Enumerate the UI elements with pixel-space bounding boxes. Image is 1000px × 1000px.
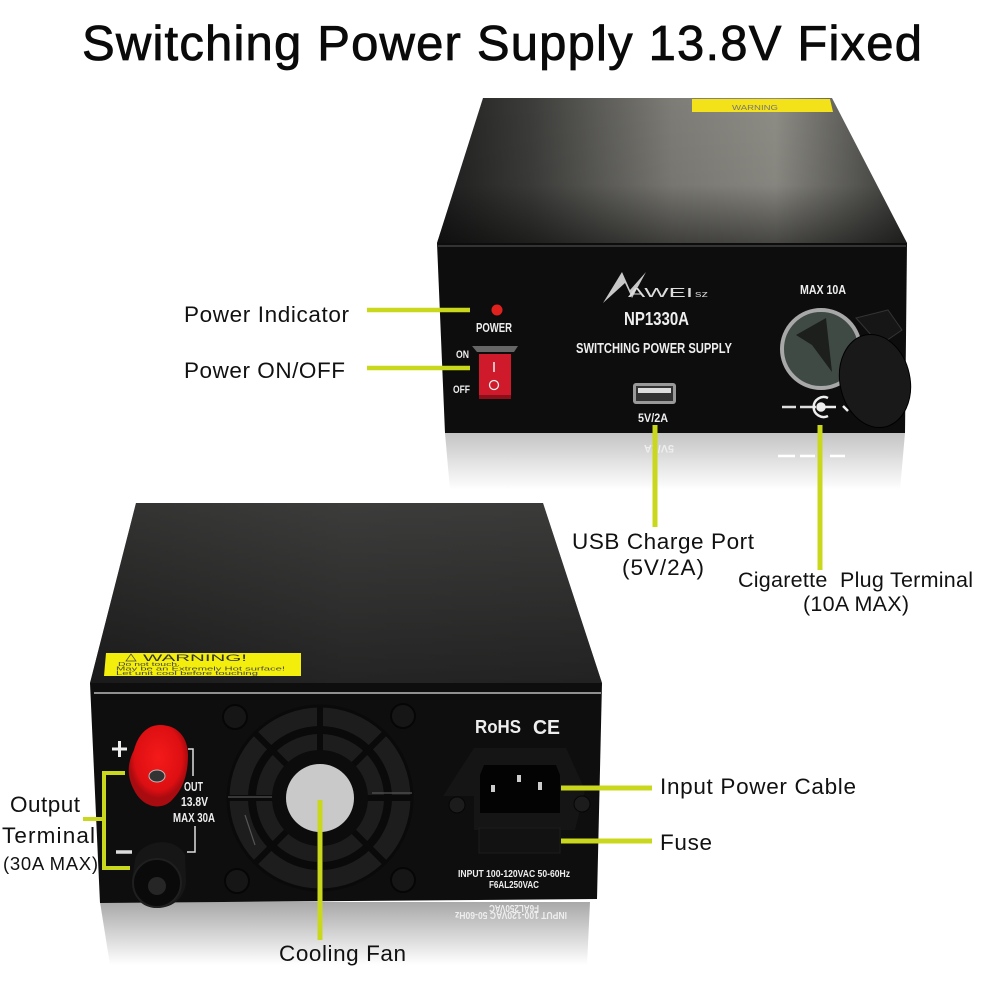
reflection under bottom unit: F6AL250VAC [489, 902, 539, 913]
product name: SWITCHING POWER SUPPLY [576, 341, 732, 357]
warning label: May be an Extremely Hot surface! [116, 666, 286, 672]
rocker switch [453, 346, 518, 399]
callout: cigarette plug terminal: (10A MAX) [803, 592, 909, 616]
reflection under bottom unit: INPUT 100-120VAC 50-60Hz [455, 909, 567, 920]
reflection under top unit: 5V/2A [644, 442, 674, 454]
warning label on top face [692, 99, 833, 112]
reflection under bottom unit [100, 902, 590, 965]
output bracket outline [187, 749, 195, 852]
callout: output terminal: (30A MAX) [3, 853, 98, 874]
POWER text: POWER [476, 320, 512, 335]
warning label: Do not touch. [118, 662, 181, 668]
top device: front-panel unit [437, 98, 919, 490]
socket cap [831, 310, 919, 434]
cigarette socket [782, 310, 860, 388]
warning label [104, 653, 301, 677]
polarity symbol [782, 406, 816, 408]
brand logo: AWEI [628, 286, 693, 300]
model name: NP1330A [624, 309, 689, 329]
black negative terminal [132, 842, 186, 908]
top face [90, 503, 602, 683]
center-positive symbol [814, 397, 848, 417]
rocker switch: ON [456, 349, 469, 361]
callout: output terminal [2, 773, 130, 874]
RoHS and CE marks [475, 717, 560, 739]
callout: cigarette plug terminal [738, 425, 973, 616]
max 10A text: MAX 10A [800, 282, 846, 297]
cooling fan [228, 706, 412, 890]
rear panel [90, 683, 602, 908]
output rating text: 13.8V [181, 794, 208, 809]
callout: USB charge port: (5V/2A) [622, 555, 704, 580]
rocker switch: OFF [453, 384, 470, 396]
callout: USB charge port: USB Charge Port [572, 529, 755, 554]
input rating text [458, 868, 570, 891]
callout: output terminal: Output [10, 792, 81, 817]
title: Switching Power Supply 13.8V Fixed [82, 17, 922, 71]
callout: output terminal: Terminal [2, 823, 95, 848]
fan highlights [228, 793, 412, 845]
callout: power indicator: Power Indicator [184, 302, 350, 327]
fan hub [272, 750, 368, 846]
front panel [437, 243, 919, 434]
brand logo [603, 272, 709, 303]
screws [223, 704, 415, 893]
USB port: 5V/2A [638, 411, 668, 425]
warning label: Let unit cool before touching [116, 671, 258, 677]
callout: cooling fan: Cooling Fan [279, 941, 406, 966]
RoHS and CE marks: RoHS [475, 717, 521, 737]
brand logo: sz [695, 289, 709, 299]
warning label: WARNING! [143, 653, 247, 663]
power LED [492, 304, 502, 316]
warning label on top face: WARNING [732, 105, 778, 112]
callout: cigarette plug terminal: Cigarette Plug Terminal [738, 568, 973, 592]
minus sign [116, 850, 132, 854]
reflection under top unit [445, 433, 905, 490]
callout: power on/off: Power ON/OFF [184, 358, 345, 383]
red positive terminal [129, 725, 188, 806]
top face [437, 98, 907, 243]
output rating text [173, 779, 215, 825]
IEC inlet and fuse [443, 748, 590, 853]
output rating text: OUT [184, 779, 203, 794]
input rating text: F6AL250VAC [489, 879, 539, 891]
callout: fuse: Fuse [660, 830, 712, 855]
callout: USB charge port [572, 425, 755, 580]
bottom device: rear-panel unit [90, 503, 602, 965]
output rating text: MAX 30A [173, 810, 215, 825]
USB port [633, 383, 676, 425]
RoHS and CE marks: CE [533, 717, 560, 739]
plus sign [112, 741, 127, 757]
input rating text: INPUT 100-120VAC 50-60Hz [458, 868, 570, 880]
callout: input power cable: Input Power Cable [660, 774, 856, 799]
